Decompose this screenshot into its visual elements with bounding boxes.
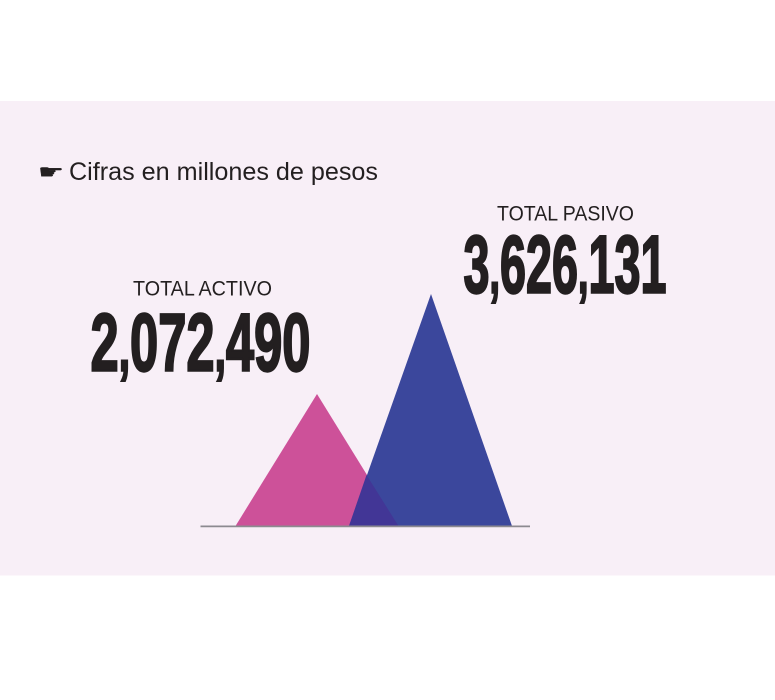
triangle: total pasivo (349, 294, 512, 526)
stat: total activo (90, 276, 310, 388)
icon: pointing hand: ☛ (38, 160, 64, 183)
panel: background (0, 101, 775, 576)
triangle: total activo (236, 394, 398, 526)
stat: total pasivo (464, 202, 666, 310)
baseline (200, 525, 530, 527)
label: total activo: TOTAL ACTIVO (133, 276, 272, 300)
heading text: Cifras en millones de pesos (69, 158, 378, 186)
heading: cifras en millones de pesos (38, 158, 378, 186)
triangle overlap (349, 475, 398, 526)
value: total pasivo: 3,626,131 (464, 220, 666, 310)
value: total activo: 2,072,490 (90, 298, 310, 388)
label: total pasivo: TOTAL PASIVO (497, 202, 634, 226)
chart: overlapping triangles (200, 294, 530, 526)
